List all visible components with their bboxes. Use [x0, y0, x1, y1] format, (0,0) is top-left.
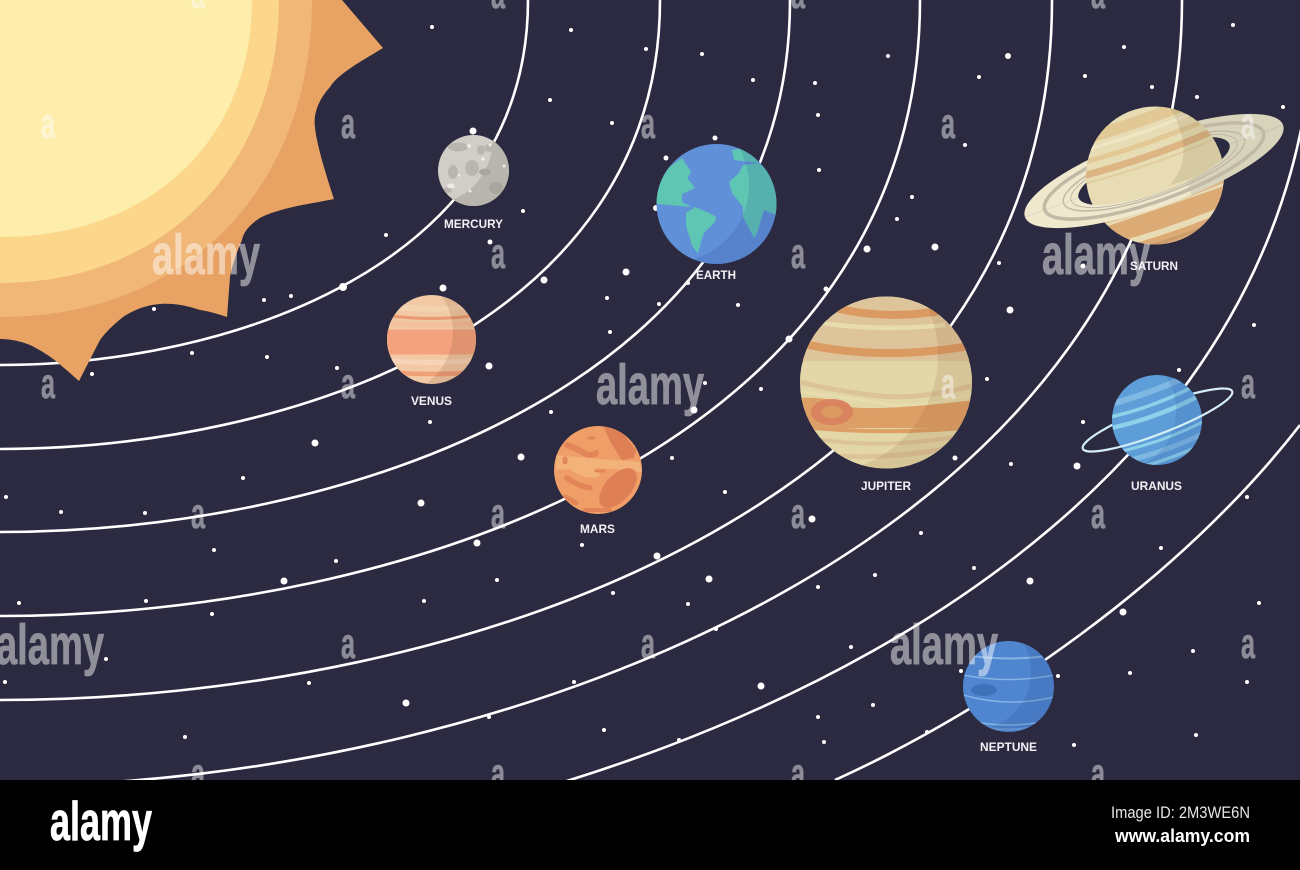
label: jupiter: JUPITER: [861, 481, 912, 493]
watermarks: a: [41, 100, 56, 148]
planet: mercury: [438, 135, 509, 228]
watermarks: a: [191, 750, 206, 798]
footer logo: alamy: [50, 790, 152, 852]
footer bar: [0, 780, 1300, 870]
label: earth: EARTH: [696, 270, 736, 282]
watermarks: a: [941, 100, 956, 148]
saturn body: [1086, 106, 1224, 244]
planet: saturn: [1024, 106, 1284, 270]
watermarks: a: [941, 360, 956, 408]
planet: earth: [656, 144, 776, 279]
watermarks: a: [491, 750, 506, 798]
watermarks: a: [641, 620, 656, 668]
watermarks: alamy: [890, 613, 998, 677]
watermarks: a: [41, 360, 56, 408]
watermarks: a: [341, 360, 356, 408]
watermarks: a: [491, 490, 506, 538]
watermarks: alamy: [0, 613, 104, 677]
saturn back ring: [1024, 114, 1283, 217]
watermarks: a: [1241, 360, 1256, 408]
uranus body: [1112, 375, 1202, 465]
sun corona with spikes: [0, 0, 383, 381]
label: venus: VENUS: [411, 396, 452, 408]
watermarks: alamy: [152, 223, 260, 287]
planet: mars: [554, 426, 644, 536]
watermarks: a: [791, 230, 806, 278]
planet: neptune: [963, 641, 1054, 751]
footer url: www.alamy.com: [1114, 826, 1250, 846]
watermarks: a: [791, 750, 806, 798]
watermarks: a: [1241, 100, 1256, 148]
image id: Image ID: 2M3WE6N: [1111, 803, 1250, 822]
watermarks: a: [791, 490, 806, 538]
label: mars: MARS: [580, 524, 615, 536]
planet: jupiter: [800, 296, 972, 490]
watermarks: a: [1091, 750, 1106, 798]
label: saturn: SATURN: [1130, 261, 1178, 273]
uranus ring back: [1082, 387, 1234, 449]
sun core: [0, 0, 252, 237]
watermarks: a: [491, 230, 506, 278]
planet: uranus: [1082, 375, 1234, 490]
watermarks: alamy: [596, 353, 704, 417]
watermarks: a: [341, 620, 356, 668]
uranus ring front: [1082, 391, 1234, 453]
sun outer layer: [0, 0, 312, 317]
sun: [0, 0, 383, 381]
label: mercury: MERCURY: [444, 219, 503, 231]
watermarks: a: [341, 100, 356, 148]
sun middle layer: [0, 0, 279, 283]
watermarks: a: [191, 490, 206, 538]
saturn front ring: [1025, 125, 1284, 228]
watermarks: a: [1241, 620, 1256, 668]
planet: venus: [387, 295, 476, 405]
watermarks: alamy: [1042, 223, 1150, 287]
label: neptune: NEPTUNE: [980, 742, 1037, 754]
label: uranus: URANUS: [1131, 481, 1182, 493]
watermarks: a: [641, 100, 656, 148]
watermarks: a: [1091, 490, 1106, 538]
